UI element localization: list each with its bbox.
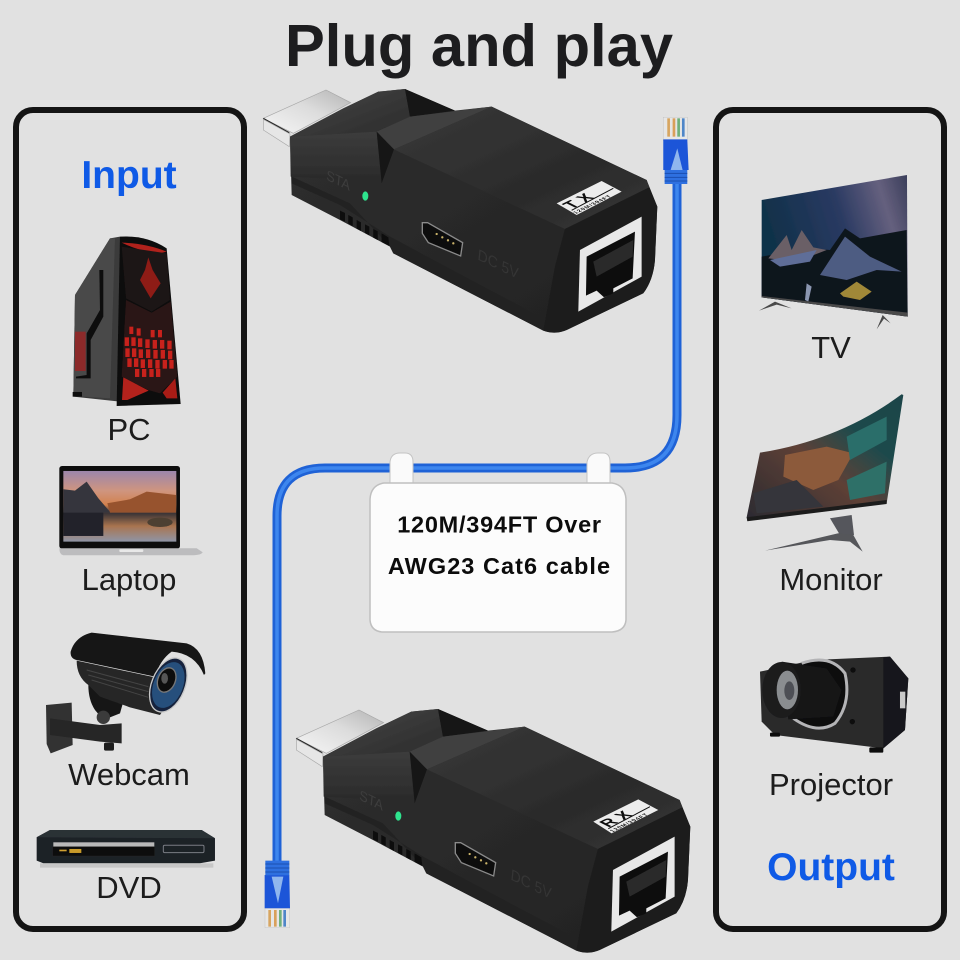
power text: DC 5V: [477, 246, 520, 283]
tag text: AWG23 Cat6 cable: [388, 553, 611, 579]
label: Laptop: Laptop: [82, 562, 176, 597]
tag loops: [390, 453, 610, 486]
TX label: [557, 181, 622, 215]
heading: Output: Output: [767, 846, 895, 889]
RJ45 jack: [578, 217, 642, 312]
TX label: TX: [558, 189, 603, 211]
tag text: [388, 512, 611, 579]
label: Monitor: Monitor: [779, 562, 883, 597]
RJ45 jack: [611, 837, 675, 932]
panel: input devices: [16, 110, 244, 929]
micro USB port: [422, 223, 463, 256]
title: Plug and play: [285, 12, 673, 79]
icon: DVD player: [37, 830, 215, 868]
power text: DC 5V: [510, 866, 553, 903]
icon: projector: [760, 657, 908, 753]
RX label: 120M/394FT: [609, 813, 651, 833]
cable tag: [370, 453, 626, 632]
TX label: 120M/394FT: [572, 194, 614, 215]
label: TV: TV: [811, 330, 851, 365]
tag body: [370, 483, 626, 632]
icon: laptop: [59, 466, 203, 555]
device: RX extender: [296, 709, 690, 953]
icon: PC tower: [73, 236, 181, 406]
LED: [395, 811, 401, 821]
device: TX extender: [263, 89, 657, 333]
LED: [362, 191, 368, 201]
RJ45 connector: bottom: [265, 861, 290, 928]
RJ45 connector: top: [663, 117, 689, 184]
tag text: 120M/394FT Over: [397, 512, 602, 538]
blue network cable: [277, 178, 677, 865]
icon: TV: [759, 175, 908, 329]
HDMI plug: [296, 710, 384, 767]
icon: webcam: [46, 633, 205, 753]
RX label: RX: [595, 807, 641, 829]
HDMI plug: [263, 90, 351, 147]
status text: STA: [326, 166, 351, 194]
label: Projector: Projector: [769, 767, 893, 802]
label: PC: PC: [107, 412, 151, 447]
RX label: [593, 799, 658, 833]
micro USB port: [455, 843, 496, 876]
status text: STA: [359, 786, 384, 814]
vents: [340, 211, 389, 246]
label: DVD: DVD: [96, 870, 162, 905]
label: Webcam: Webcam: [68, 757, 190, 792]
icon: monitor: [747, 394, 903, 552]
heading: Input: Input: [81, 154, 177, 197]
panel: output devices: [716, 110, 944, 929]
vents: [373, 831, 422, 866]
